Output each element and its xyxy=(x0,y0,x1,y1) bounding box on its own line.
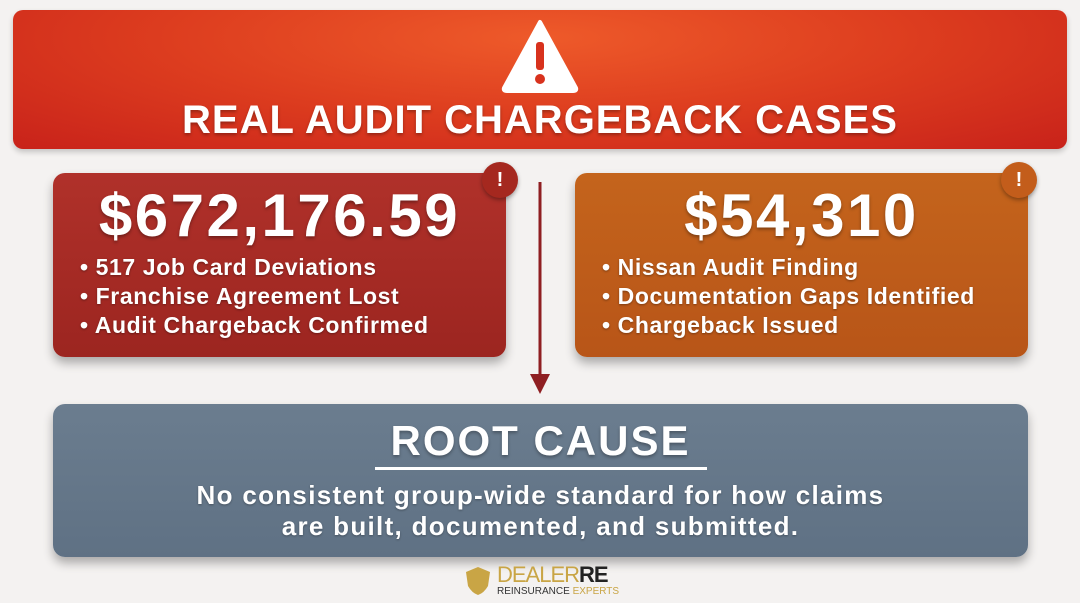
icon: badge 1 xyxy=(482,162,518,198)
bullets 2 xyxy=(602,254,975,340)
title: REAL AUDIT CHARGEBACK CASES xyxy=(182,98,898,142)
logo xyxy=(466,562,619,597)
logo: REINSURANCE EXPERTS xyxy=(497,586,619,597)
icon: badge 1: ! xyxy=(497,169,503,191)
root cause text: No consistent group-wide standard for how claims xyxy=(197,480,884,510)
panel: case 1 xyxy=(53,173,506,357)
icon: badge 2 xyxy=(1001,162,1037,198)
bullets 1: • Audit Chargeback Confirmed xyxy=(80,312,429,338)
amount 1: $672,176.59 xyxy=(99,182,460,249)
root cause text xyxy=(197,480,884,541)
logo: DEALERRE xyxy=(497,562,608,587)
panel: root cause xyxy=(53,404,1028,557)
bullets 2: • Chargeback Issued xyxy=(602,312,839,338)
arrow xyxy=(530,182,550,394)
icon: warning triangle xyxy=(502,20,578,93)
amount 2: $54,310 xyxy=(684,182,919,249)
bullets 1: • 517 Job Card Deviations xyxy=(80,254,377,280)
bullets 1 xyxy=(80,254,429,340)
root cause text: are built, documented, and submitted. xyxy=(282,511,799,541)
bullets 2: • Documentation Gaps Identified xyxy=(602,283,975,309)
icon: badge 2: ! xyxy=(1016,169,1022,191)
banner xyxy=(13,10,1067,149)
root cause heading: ROOT CAUSE xyxy=(390,417,690,464)
bullets 1: • Franchise Agreement Lost xyxy=(80,283,399,309)
bullets 2: • Nissan Audit Finding xyxy=(602,254,859,280)
panel: case 2 xyxy=(575,173,1028,357)
